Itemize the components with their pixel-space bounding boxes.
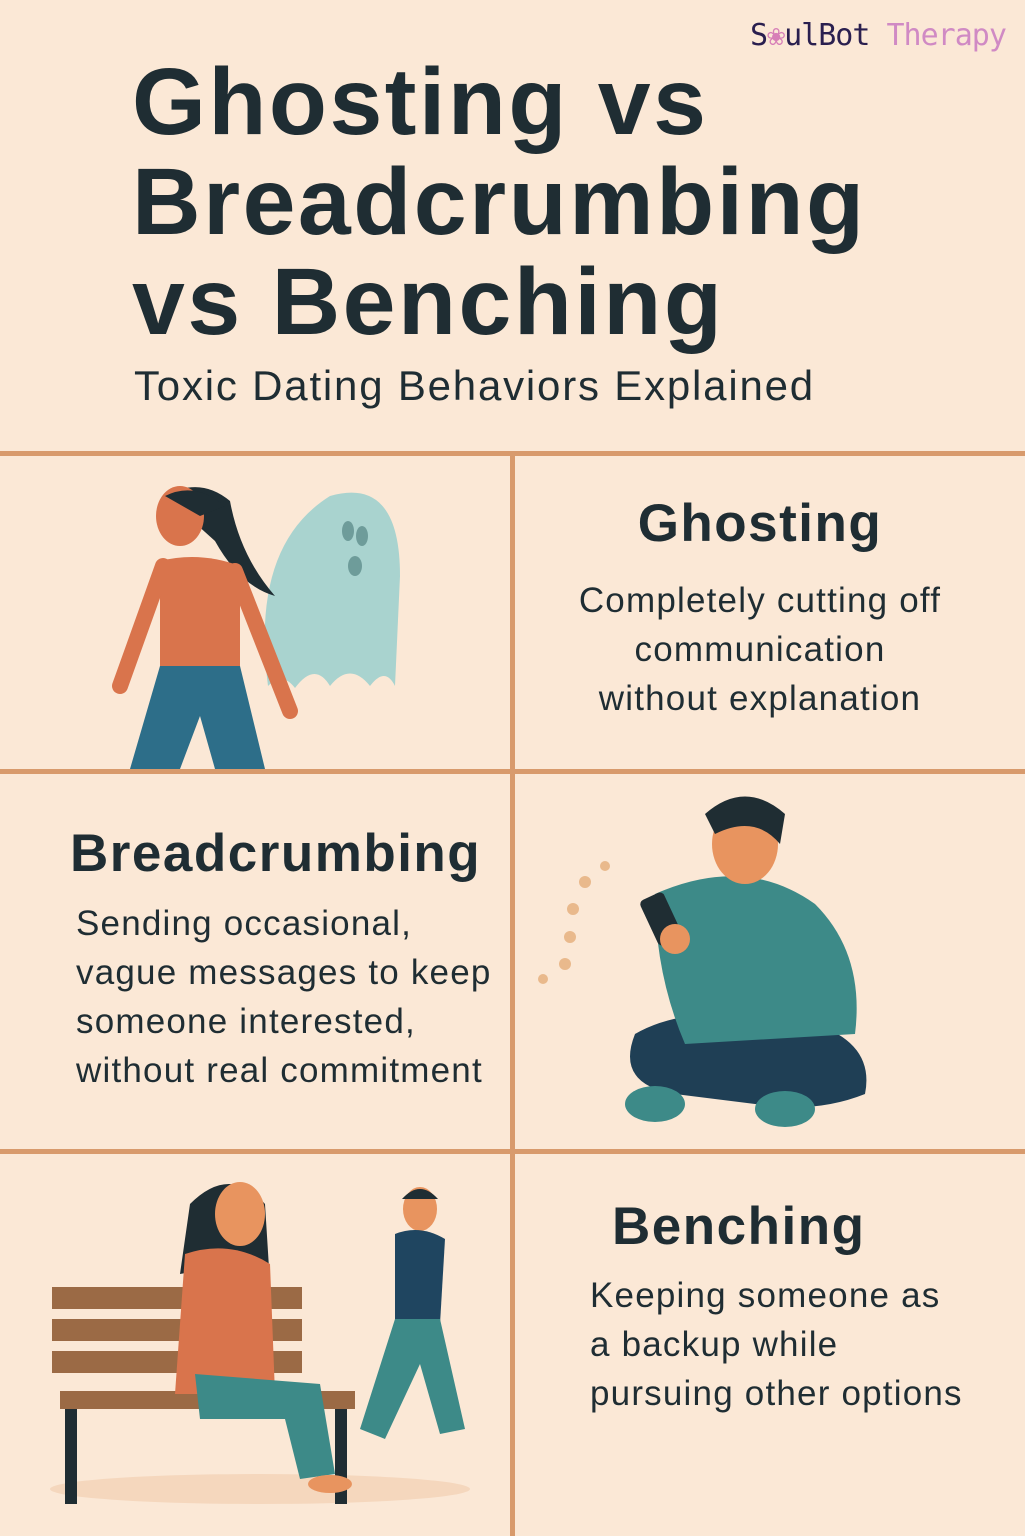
panel: ghosting text: Ghosting [638, 494, 882, 553]
panel: ghosting text: Completely cutting off [579, 581, 941, 620]
panel: ghosting text: without explanation [599, 679, 921, 718]
icon: bench [52, 1287, 355, 1504]
panel: breadcrumbing illustration [538, 796, 866, 1127]
panel: breadcrumbing text: Sending occasional, [76, 904, 412, 943]
title: vs Benching [132, 249, 724, 355]
panel: benching text: Keeping someone as [590, 1276, 940, 1315]
logo: S❀ulBot Therapy [750, 18, 1006, 53]
panel: breadcrumbing text: without real commitment [76, 1051, 483, 1090]
panel: benching text: pursuing other options [590, 1374, 963, 1413]
panel: breadcrumbing text [70, 824, 492, 1090]
icon: ghost [265, 493, 400, 688]
panel: breadcrumbing text: Breadcrumbing [70, 824, 481, 883]
icon: walking man [360, 1187, 465, 1439]
panel: breadcrumbing text: someone interested, [76, 1002, 416, 1041]
icon: woman walking [120, 486, 290, 769]
panel: benching text: a backup while [590, 1325, 838, 1364]
grid lines [0, 451, 1025, 456]
title [132, 49, 867, 355]
panel: benching illustration [50, 1182, 470, 1504]
title: Ghosting vs [132, 49, 708, 155]
panel: ghosting text [579, 494, 941, 718]
subtitle: Toxic Dating Behaviors Explained [134, 362, 815, 409]
icon: sitting woman [175, 1182, 352, 1493]
icon: crumbs [538, 861, 610, 984]
panel: breadcrumbing text: vague messages to keep [76, 953, 492, 992]
icon: man with phone [625, 796, 866, 1127]
panel: benching text [590, 1197, 963, 1413]
panel: ghosting text: communication [634, 630, 885, 669]
title: Breadcrumbing [132, 149, 867, 255]
panel: ghosting illustration [112, 486, 400, 769]
panel: benching text: Benching [612, 1197, 865, 1256]
